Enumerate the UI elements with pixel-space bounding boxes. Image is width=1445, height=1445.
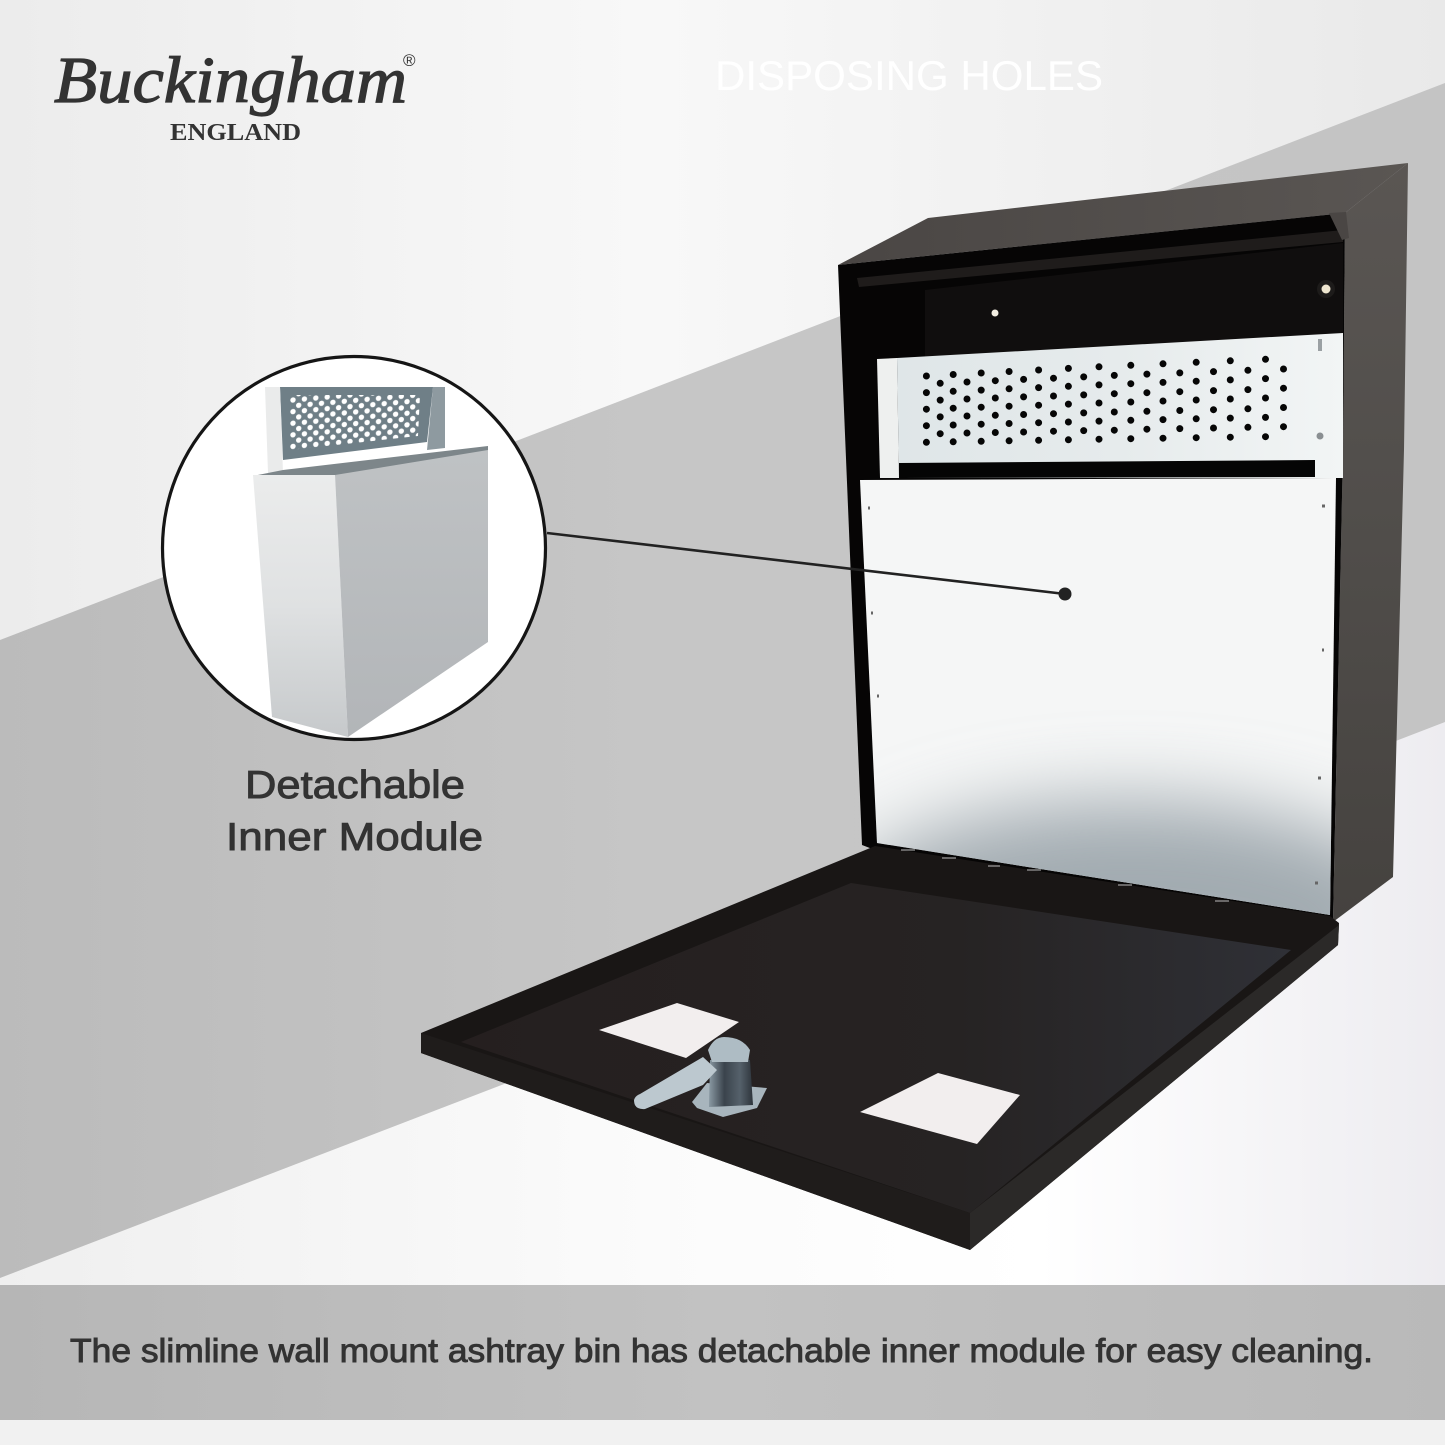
stainless steel inner module xyxy=(860,478,1336,915)
mounting screw holes xyxy=(992,310,998,316)
threaded barrel xyxy=(709,1060,753,1107)
hex nut xyxy=(692,1083,767,1117)
perforated plate xyxy=(877,333,1343,478)
tray front face xyxy=(421,1033,970,1250)
ashtray bin: open door tray xyxy=(421,846,1339,1250)
hinge dashes xyxy=(901,850,1229,901)
roof xyxy=(838,163,1408,265)
caption text: The slimline wall mount ashtray bin has detachable inner module for easy cleaning. xyxy=(70,1332,1373,1369)
lock lever xyxy=(634,1057,717,1109)
inset circle: detachable inner module xyxy=(162,356,546,740)
bottom caption strip xyxy=(0,1285,1445,1420)
logo: Buckingham England: ® xyxy=(403,51,416,70)
disposal opening right xyxy=(860,1073,1020,1144)
tray outer shape xyxy=(421,846,1339,1250)
tray right face xyxy=(970,925,1339,1250)
inset label: Detachable xyxy=(245,764,465,807)
inset label xyxy=(226,764,483,859)
logo: Buckingham England xyxy=(54,44,416,146)
tray floor xyxy=(461,883,1291,1213)
interior xyxy=(838,213,1345,922)
side panel xyxy=(1333,163,1408,922)
faint heading: disposing holes: DISPOSING HOLES xyxy=(715,52,1103,99)
ashtray bin: body xyxy=(838,163,1408,920)
inset label: Inner Module xyxy=(226,816,483,859)
barrel head xyxy=(708,1037,750,1062)
logo: Buckingham England: ENGLAND xyxy=(170,120,301,146)
disposal opening left xyxy=(599,1003,739,1058)
lock xyxy=(634,1037,767,1117)
inset perforated plate xyxy=(265,387,445,473)
callout line to inner module xyxy=(547,533,1072,600)
logo: Buckingham England: Buckingham xyxy=(54,44,407,117)
inset steel box xyxy=(253,446,488,737)
